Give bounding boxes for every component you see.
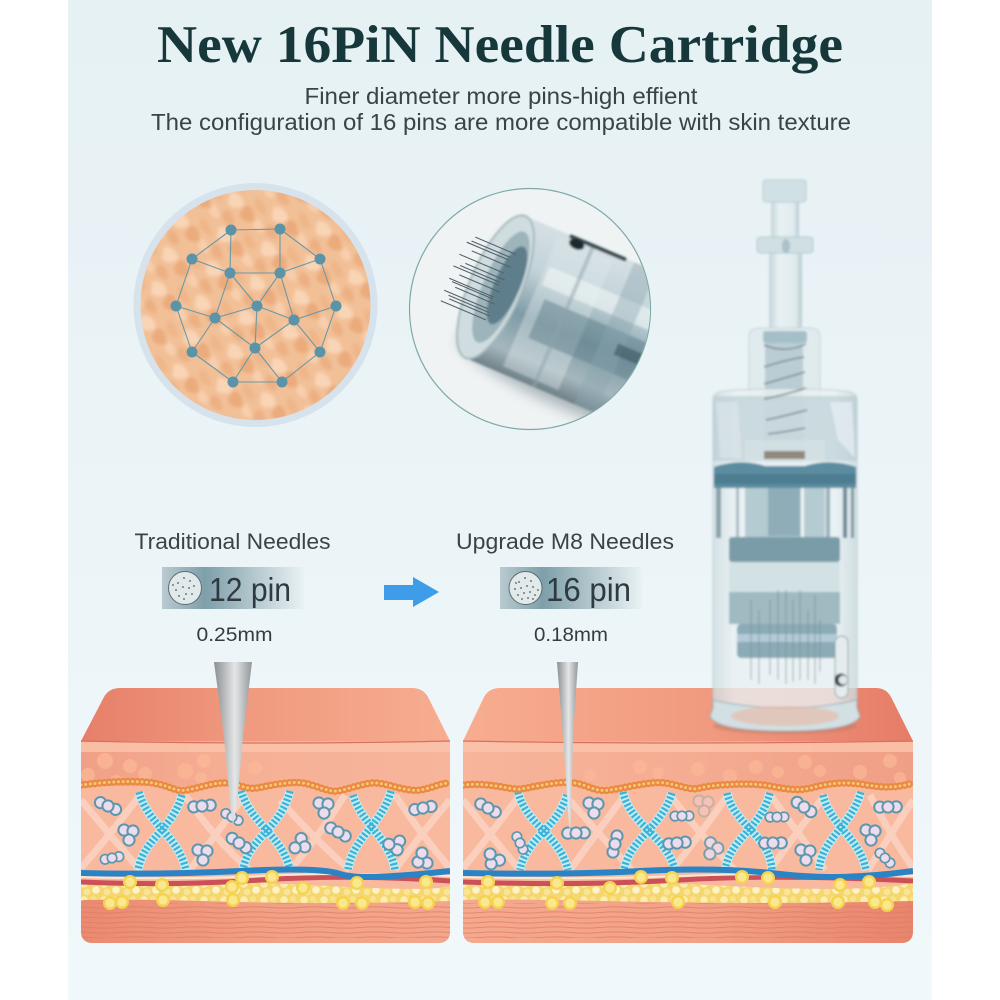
pale fibres xyxy=(81,795,450,870)
red vessel xyxy=(463,877,913,884)
arrow xyxy=(384,577,439,607)
muscle layer xyxy=(81,900,450,943)
base flange xyxy=(710,700,860,731)
blue vessel xyxy=(463,870,913,877)
side slot xyxy=(835,636,848,698)
ribs xyxy=(716,488,854,540)
badge: 12 pin xyxy=(162,567,304,609)
badge: 16 pin: 16 pin xyxy=(546,571,631,608)
label: upgrade M8 needles: Upgrade M8 Needles xyxy=(456,529,674,554)
epidermis xyxy=(572,741,913,786)
blue vessel xyxy=(81,870,450,877)
shaft and stem xyxy=(757,180,813,330)
label: traditional needles: Traditional Needles xyxy=(134,529,330,554)
cell clusters xyxy=(473,797,503,819)
inner cylinder xyxy=(729,537,840,658)
main glass body xyxy=(713,388,857,708)
needle: traditional xyxy=(214,662,252,825)
fat layer xyxy=(80,882,451,903)
badge: 16 pin xyxy=(500,567,642,609)
skin texture circle with pin network xyxy=(134,183,378,427)
epidermis bead line xyxy=(463,782,913,790)
spring xyxy=(764,344,807,434)
cartridge product xyxy=(710,180,860,734)
red vessel xyxy=(81,877,450,884)
skin block: traditional needles xyxy=(80,688,451,943)
dark band xyxy=(714,462,856,488)
cartridge close-up circle xyxy=(408,188,652,430)
fat cells xyxy=(481,875,495,889)
skin block: M8 needles xyxy=(460,688,913,943)
title: New 16PiN Needle Cartridge xyxy=(157,16,843,74)
pale fibres xyxy=(463,795,913,870)
upper cylinder xyxy=(749,328,820,400)
fat cells xyxy=(123,875,137,889)
cell clusters xyxy=(93,796,123,816)
network nodes xyxy=(170,224,342,388)
subtitle text block: Finer diameter more pins-high effient xyxy=(304,83,698,109)
needle pins xyxy=(439,234,516,321)
subtitle text block: The configuration of 16 pins are more compatible with skin texture xyxy=(151,109,851,135)
cartridge body xyxy=(455,213,650,412)
needle pins xyxy=(751,590,820,684)
collagen helices xyxy=(138,791,395,870)
epidermis xyxy=(81,741,286,786)
epidermis bead line xyxy=(81,782,450,791)
network lines xyxy=(176,229,336,382)
subtitle text block xyxy=(151,83,851,135)
needle: M8 xyxy=(557,662,578,835)
badge: 12 pin: 12 pin xyxy=(209,571,291,608)
muscle layer xyxy=(463,900,913,943)
fat layer xyxy=(460,882,913,903)
label: 0.25mm: 0.25mm xyxy=(196,625,272,646)
label: 0.18mm: 0.18mm xyxy=(534,625,608,646)
collagen helices xyxy=(518,792,866,870)
cartridge shadow xyxy=(713,718,857,734)
